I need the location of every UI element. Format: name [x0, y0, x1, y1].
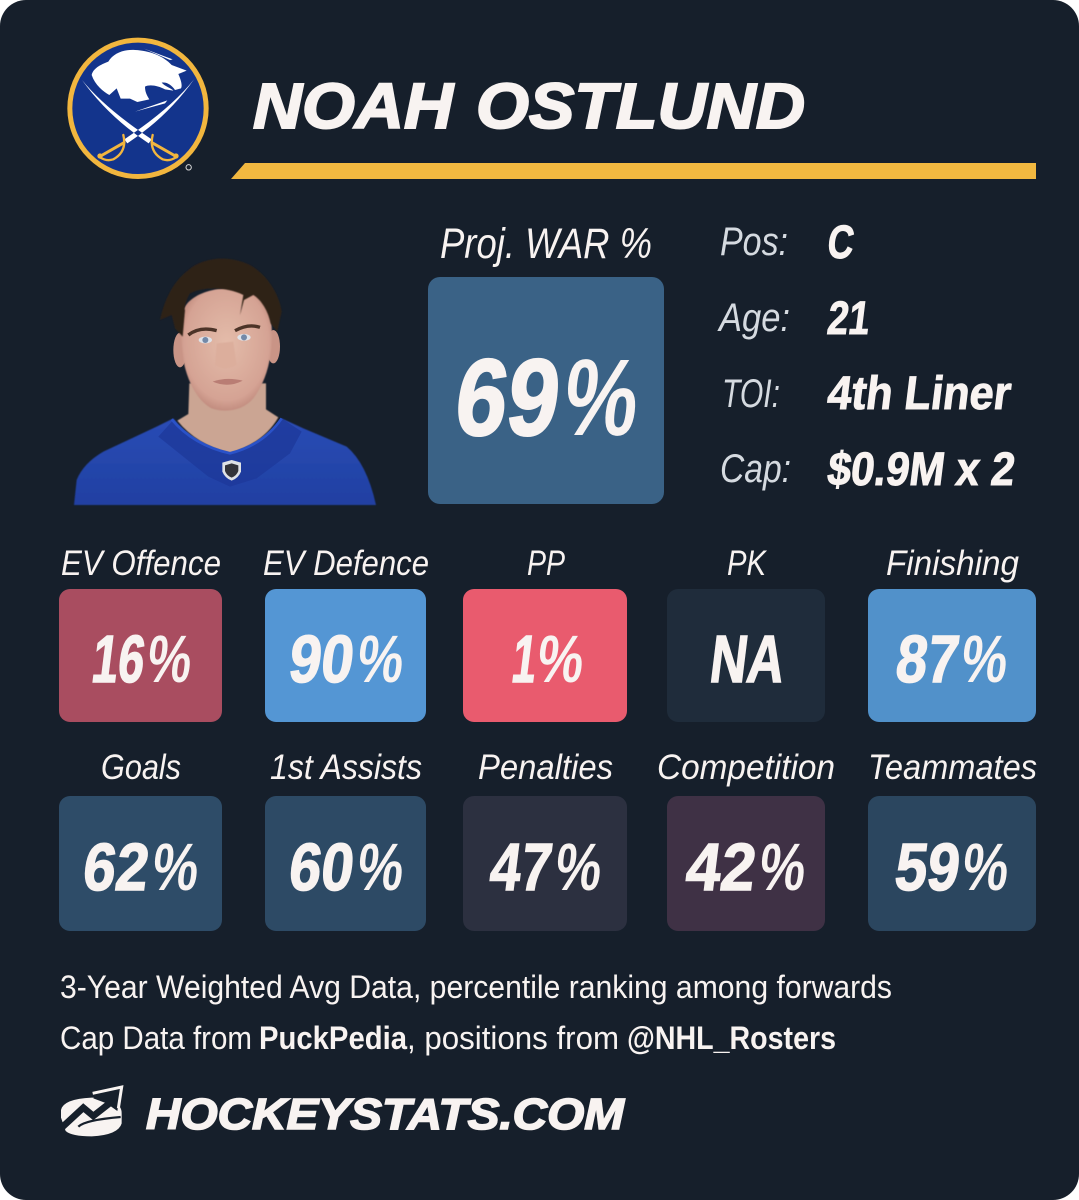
stat: Finishing: [868, 544, 1036, 722]
player portrait: [74, 259, 376, 505]
stat: PP: PP: [527, 544, 566, 583]
footnote: sources: @NHL_Rosters: [627, 1020, 836, 1056]
player facts: Cap:: [720, 447, 791, 491]
icon: HockeyStats puck with rising arrow: [61, 1087, 122, 1136]
stat: Competition: [657, 748, 835, 931]
player facts: $0.9M x 2: [825, 442, 1018, 495]
stat: Goals: Goals: [101, 748, 181, 787]
stat: EV Defence: EV Defence: [263, 544, 429, 583]
stat: Penalties: [463, 748, 627, 931]
player facts: Age:: [717, 296, 790, 340]
stat: Teammates: %: [958, 830, 1013, 905]
team logo: Buffalo Sabres: [67, 38, 209, 179]
stat: Goals: [59, 748, 222, 931]
stat: Competition: Competition: [657, 748, 835, 787]
nose and mouth: [215, 342, 237, 368]
stat: EV Offence: EV Offence: [61, 544, 221, 583]
stat: Competition: 42: [682, 830, 760, 905]
face: [181, 288, 272, 411]
footnote: data description: 3-Year Weighted Avg Data, percentile ranking among forwards: [60, 969, 892, 1005]
stat: EV Offence: [59, 544, 222, 722]
stat: 1st Assists: %: [353, 830, 408, 905]
player facts: 4th Liner: [825, 366, 1014, 419]
player name heading: [253, 70, 805, 142]
HockeyStats wordmark: HOCKEYSTATS.COM: [146, 1090, 625, 1139]
stat: EV Defence: %: [353, 622, 408, 697]
stat: Finishing: 87: [892, 622, 963, 697]
stat: Penalties: 47: [486, 830, 556, 905]
hair: [160, 259, 282, 337]
collar: [158, 418, 302, 487]
stat: Teammates: [868, 748, 1037, 931]
neck: [177, 383, 278, 453]
Proj. WAR tile: 69: [449, 337, 567, 459]
footnote: sources: Cap Data from: [60, 1020, 252, 1056]
player facts: TOI:: [722, 372, 780, 416]
stat: PK: NA: [706, 622, 789, 697]
footnote: sources: PuckPedia: [259, 1020, 407, 1056]
stat: 1st Assists: 60: [285, 830, 358, 905]
NHL shield crest: [222, 460, 241, 481]
player name heading: OSTLUND: [476, 70, 805, 142]
stat: Teammates: 59: [891, 830, 964, 905]
stat: Goals: %: [148, 830, 203, 905]
stat: EV Defence: [263, 544, 429, 722]
player facts: 21: [825, 291, 873, 344]
stat: PK: [667, 544, 825, 722]
stat: Competition: %: [755, 830, 810, 905]
ears: [173, 333, 187, 367]
stat: Penalties: Penalties: [478, 748, 613, 787]
eyebrows: [188, 326, 260, 335]
stat: PP: %: [533, 622, 588, 697]
player facts: Pos:: [720, 220, 788, 264]
player name heading: NOAH: [253, 70, 455, 142]
Proj. WAR tile: %: [557, 337, 646, 459]
stat: PK: PK: [727, 544, 767, 583]
eyes: [199, 337, 212, 343]
jersey: [74, 418, 376, 505]
stat: EV Offence: %: [143, 622, 196, 697]
stat: EV Defence: 90: [285, 622, 358, 697]
gold heading rule: [231, 163, 1036, 179]
stat: 1st Assists: 1st Assists: [270, 748, 422, 787]
footnote: sources: [60, 1020, 836, 1056]
stat: Penalties: %: [551, 830, 606, 905]
stat: 1st Assists: [265, 748, 426, 931]
Proj. WAR label: Proj. WAR %: [440, 220, 652, 268]
Proj. WAR tile: [428, 277, 664, 504]
player facts: [717, 215, 1018, 495]
stat: EV Offence: 16: [88, 622, 149, 697]
stat: Goals: 62: [79, 830, 153, 905]
player facts: C: [825, 215, 857, 268]
stat: PP: [463, 544, 627, 722]
stat: Finishing: %: [957, 622, 1012, 697]
stat: Teammates: Teammates: [868, 748, 1037, 787]
footnote: sources: , positions from: [407, 1020, 619, 1056]
stat: Finishing: Finishing: [886, 544, 1019, 583]
stat: PP: 1: [508, 622, 541, 697]
